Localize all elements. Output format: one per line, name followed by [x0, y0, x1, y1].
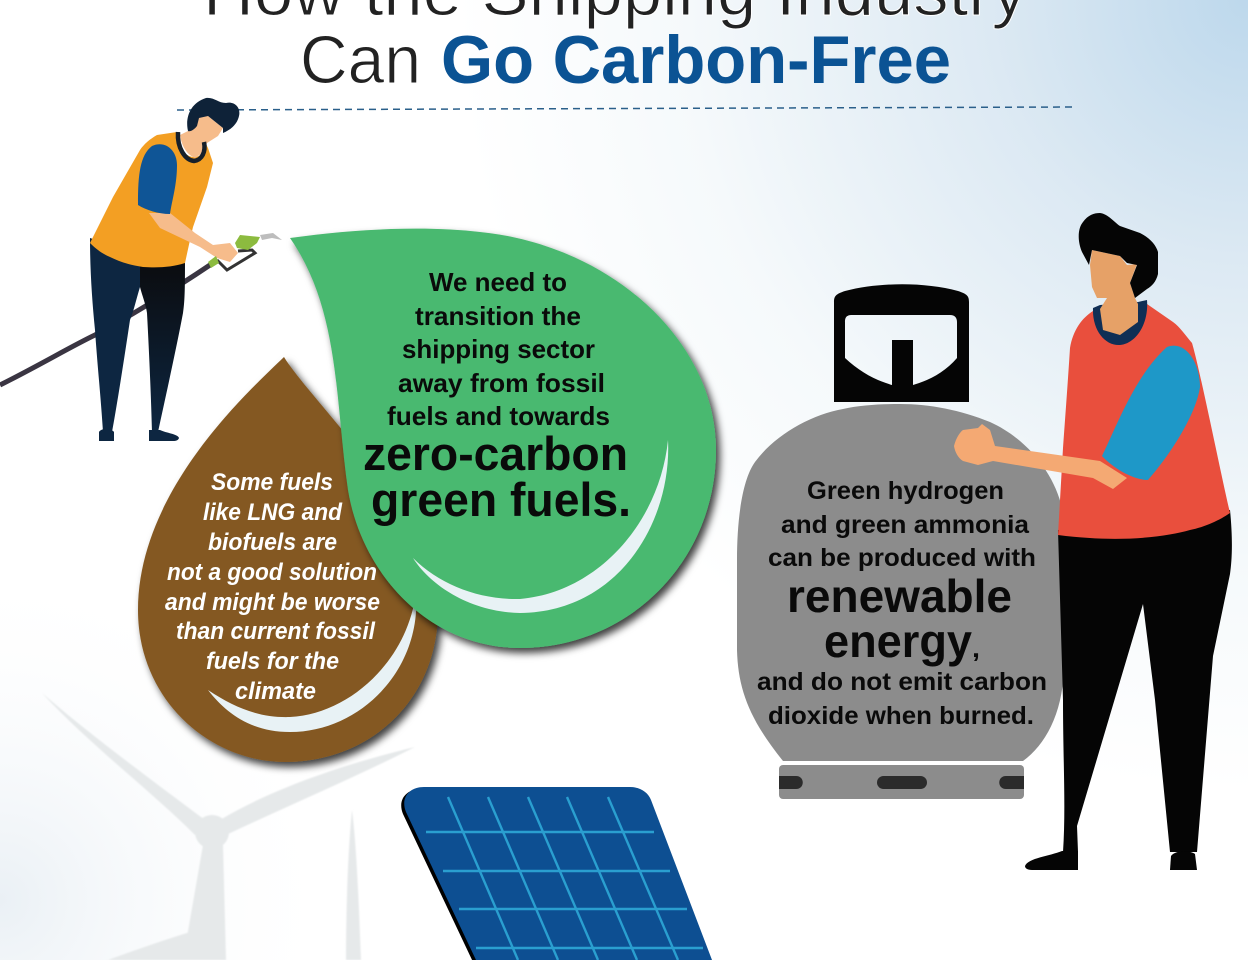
panel edge	[401, 789, 709, 960]
cylinder handle	[834, 284, 969, 402]
gas cylinder text: energy	[824, 615, 972, 667]
sleeve	[1102, 346, 1200, 480]
gas cylinder text: and green ammonia	[781, 511, 1030, 539]
green droplet text: fuels and towards	[387, 401, 610, 431]
forearm	[149, 213, 238, 262]
title	[203, 0, 1027, 98]
arm and hand	[954, 424, 1127, 489]
green droplet highlight	[413, 440, 668, 613]
hair	[1079, 213, 1158, 298]
brown droplet text: climate	[235, 678, 316, 705]
turbine tower	[183, 845, 226, 960]
green droplet text: away from fossil	[398, 368, 605, 398]
collar	[1093, 300, 1147, 345]
brown droplet text: Some fuels	[211, 469, 333, 496]
right leg	[140, 255, 185, 432]
gas cylinder text	[757, 477, 1047, 730]
gas cylinder text: and do not emit carbon	[757, 668, 1047, 696]
panel face	[404, 787, 712, 960]
base slots	[779, 776, 1024, 789]
shirt	[1058, 304, 1230, 539]
fuel nozzle	[208, 233, 282, 270]
gas cylinder text: renewable	[787, 570, 1012, 622]
green droplet text: shipping sector	[402, 334, 595, 364]
left leg	[90, 238, 143, 432]
hair	[187, 98, 239, 133]
gas cylinder text: Green hydrogen	[807, 477, 1004, 505]
brown droplet text: not a good solution	[167, 559, 377, 586]
green droplet text: We need to	[429, 267, 567, 297]
face and neck	[180, 116, 223, 158]
neck and face	[1090, 250, 1138, 335]
green droplet text: zero-carbon	[363, 427, 628, 480]
title line 2: Go Carbon-Free	[441, 22, 951, 98]
gas cylinder text: dioxide when burned.	[768, 702, 1034, 730]
solar panel	[401, 787, 712, 960]
shoes	[1025, 851, 1197, 870]
dashed divider	[177, 107, 1072, 110]
lower-left turbine blade	[108, 928, 203, 960]
shoes	[99, 429, 179, 441]
fuel hose	[0, 265, 210, 385]
wind turbines	[42, 693, 415, 960]
collar	[178, 132, 205, 161]
brown droplet shape	[138, 357, 438, 762]
second turbine blade	[346, 810, 361, 960]
brown droplet text	[165, 469, 380, 705]
panel: brown droplet	[138, 357, 438, 762]
gas cylinder text: can be produced with	[768, 544, 1036, 572]
sleeve	[138, 144, 177, 214]
brown droplet highlight	[208, 592, 416, 732]
brown droplet text: like LNG and	[203, 499, 343, 526]
vest	[90, 132, 213, 267]
green droplet text: green fuels.	[371, 473, 631, 526]
trousers	[1058, 510, 1232, 852]
panel: green droplet	[290, 229, 716, 648]
gas cylinder text: ,	[972, 635, 980, 663]
gas cylinder	[737, 284, 1064, 799]
brown droplet text: and might be worse	[165, 589, 380, 616]
cylinder base	[779, 765, 1024, 799]
panel grid	[426, 797, 703, 960]
brown droplet text: than current fossil	[176, 618, 376, 645]
green droplet shape	[290, 229, 716, 648]
green droplet text	[363, 267, 631, 526]
cylinder body	[737, 404, 1064, 761]
brown droplet text: biofuels are	[208, 529, 337, 556]
turbine hub and blades	[42, 693, 415, 849]
person beside gas cylinder	[954, 213, 1232, 870]
person with fuel nozzle	[0, 98, 282, 441]
title line 2: Can	[300, 22, 421, 98]
green droplet text: transition the	[415, 301, 581, 331]
brown droplet text: fuels for the	[206, 648, 339, 675]
